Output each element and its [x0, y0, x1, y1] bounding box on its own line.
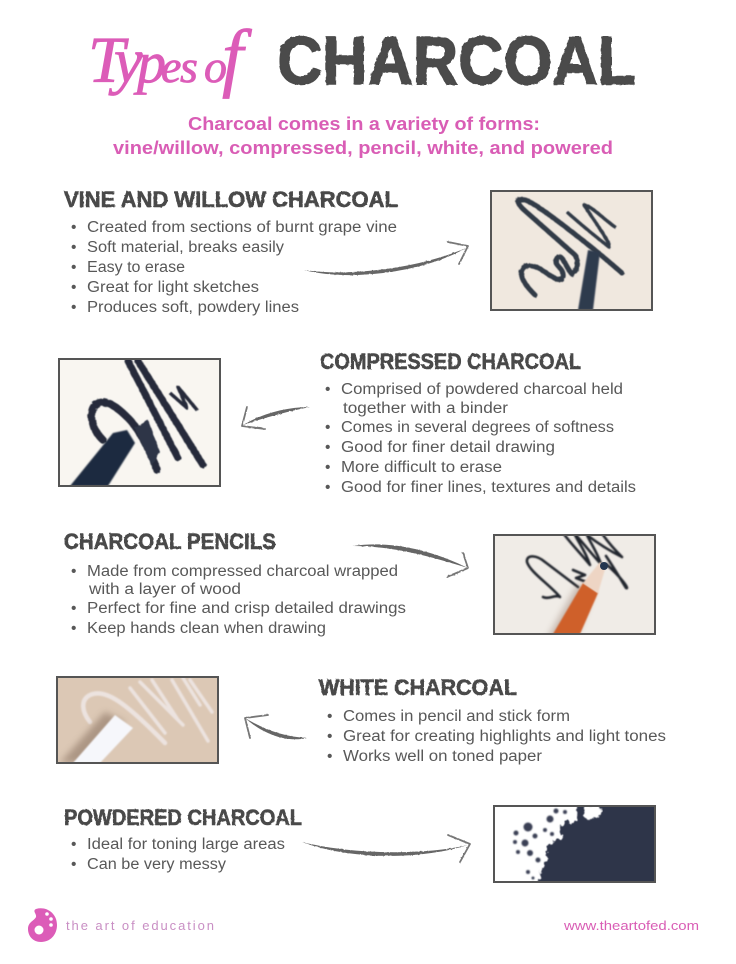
bullet list: compressed: Comes in several degrees of softness [341, 419, 614, 436]
title: y [108, 25, 143, 96]
title: s [180, 41, 198, 92]
bullet list: powdered: • [71, 856, 76, 873]
bullet list: vine and willow: • [71, 239, 76, 256]
arrow: to vine photo [304, 242, 468, 275]
title [88, 15, 636, 99]
bullet list: vine and willow: Great for light sketches [87, 279, 259, 296]
bullet list: compressed: • [325, 459, 330, 476]
panel: white charcoal [57, 675, 666, 765]
arrow: to white charcoal photo [245, 715, 307, 739]
bullet list: vine and willow: Produces soft, powdery lines [87, 299, 299, 316]
bullet list: vine and willow: Created from sections of burnt grape vine [87, 219, 397, 236]
panel: charcoal pencils [64, 529, 655, 640]
title: p [133, 30, 166, 95]
bullet list: compressed: Comprised of powdered charcoal held [341, 381, 623, 398]
bullet list: compressed [325, 381, 636, 496]
bullet list: powdered: Can be very messy [87, 856, 226, 873]
bullet list: pencils: Keep hands clean when drawing [87, 620, 326, 637]
heading: white charcoal: WHITE CHARCOAL [319, 675, 517, 700]
bullet list: pencils: Perfect for fine and crisp detailed drawings [87, 600, 406, 617]
title: e [161, 41, 181, 92]
bullet list: powdered: • [71, 836, 76, 853]
title: T [88, 24, 129, 97]
bullet list: pencils: Made from compressed charcoal wrapped [87, 563, 398, 580]
photo: white charcoal [57, 677, 218, 763]
arrow: to pencil photo [353, 544, 468, 577]
photo: charcoal pencil [494, 533, 655, 640]
bullet list: vine and willow: • [71, 299, 76, 316]
bullet list: vine and willow [71, 219, 397, 316]
footer logo: palette icon [28, 908, 57, 942]
bullet list: vine and willow: Soft material, breaks easily [87, 239, 284, 256]
bullet list: white charcoal: • [327, 748, 332, 765]
heading: vine and willow: VINE AND WILLOW CHARCOAL [64, 187, 398, 212]
footer brand name: the art of education [66, 918, 214, 933]
photo: compressed charcoal [59, 359, 220, 486]
title: o [204, 41, 227, 92]
arrow: to powdered photo [302, 835, 470, 862]
heading: compressed: COMPRESSED CHARCOAL [320, 349, 581, 374]
heading: powdered charcoal: POWDERED CHARCOAL [64, 805, 302, 830]
bullet list: vine and willow: • [71, 279, 76, 296]
subtitle: Charcoal comes in a variety of forms: [188, 114, 540, 134]
bullet list: compressed: • [325, 439, 330, 456]
bullet list: compressed: More difficult to erase [341, 459, 502, 476]
bullet list: white charcoal: • [327, 728, 332, 745]
title: f [222, 15, 252, 99]
bullet list: compressed: • [325, 419, 330, 436]
bullet list: compressed: • [325, 479, 330, 496]
bullet list: pencils: • [71, 600, 76, 617]
bullet list: vine and willow: • [71, 259, 76, 276]
bullet list: pencils: • [71, 620, 76, 637]
arrow: to compressed photo [242, 407, 310, 429]
heading: charcoal pencils: CHARCOAL PENCILS [64, 529, 276, 554]
bullet list: pencils [71, 563, 406, 637]
bullet list: powdered: Ideal for toning large areas [87, 836, 285, 853]
photo: powdered charcoal [494, 800, 665, 890]
bullet list: compressed: together with a binder [343, 400, 508, 417]
bullet list: compressed: • [325, 381, 330, 398]
subtitle: vine/willow, compressed, pencil, white, and powered [113, 138, 613, 158]
bullet list: pencils: with a layer of wood [88, 581, 241, 598]
bullet list: white charcoal: Comes in pencil and stick form [343, 708, 570, 725]
bullet list: compressed: Good for finer detail drawing [341, 439, 555, 456]
bullet list: white charcoal: Works well on toned paper [343, 748, 542, 765]
bullet list: compressed: Good for finer lines, textures and details [341, 479, 636, 496]
bullet list: white charcoal: Great for creating highlights and light tones [343, 728, 666, 745]
bullet list: pencils: • [71, 563, 76, 580]
bullet list: vine and willow: Easy to erase [87, 259, 185, 276]
panel: compressed charcoal [59, 349, 636, 496]
title: CHARCOAL [277, 23, 636, 99]
bullet list: powdered [71, 836, 285, 873]
panel: vine and willow charcoal [64, 187, 653, 316]
photo: vine charcoal [491, 191, 653, 310]
subtitle [113, 114, 613, 158]
bullet list: white charcoal [327, 708, 666, 765]
footer url: www.theartofed.com [563, 918, 699, 933]
bullet list: vine and willow: • [71, 219, 76, 236]
panel: powdered charcoal [64, 800, 665, 890]
bullet list: white charcoal: • [327, 708, 332, 725]
